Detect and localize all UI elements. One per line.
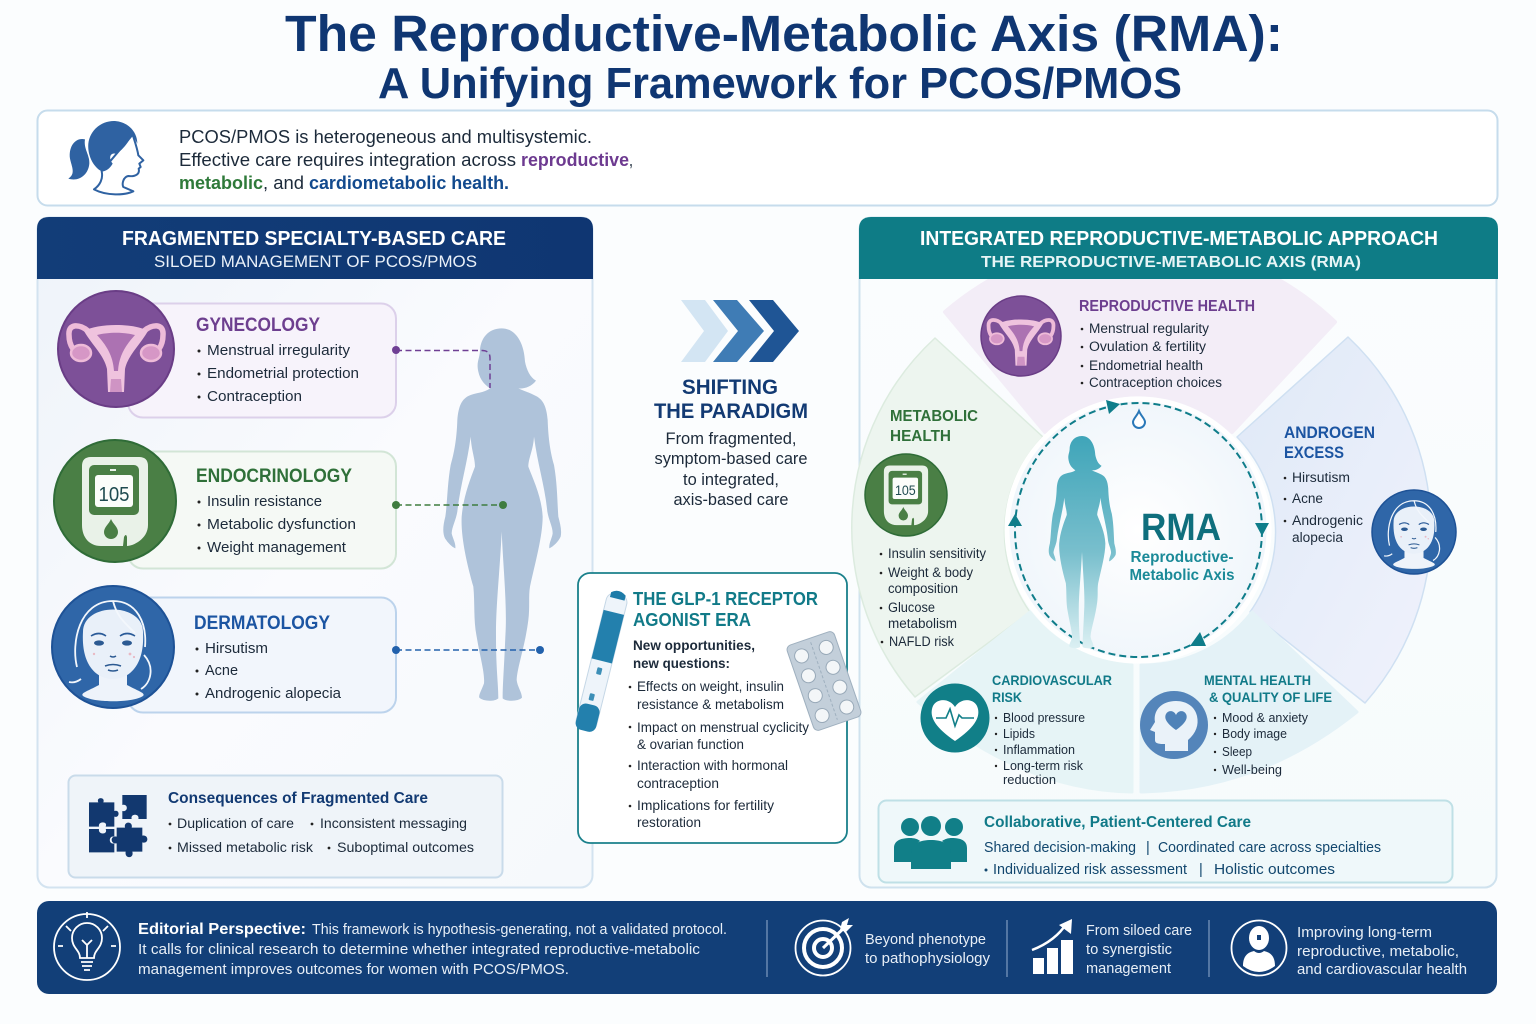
dermatology connector (392, 646, 544, 654)
cardiovascular risk content (920, 672, 1112, 787)
footer: editorial perspective (37, 901, 1497, 994)
metabolic health content: HEALTH (890, 428, 951, 445)
consequences text: Inconsistent messaging (320, 815, 467, 831)
consequences text: Consequences of Fragmented Care (168, 790, 428, 807)
endocrinology text: Insulin resistance (207, 493, 322, 510)
segment: metabolic health (852, 338, 1043, 697)
gynecology text: Menstrual irregularity (207, 342, 351, 359)
androgen excess content: Acne (1292, 491, 1323, 506)
arrow: right (1255, 523, 1269, 536)
collaborative text: Collaborative, Patient-Centered Care (984, 814, 1251, 831)
collaborative text (984, 814, 1381, 878)
dermatology text: Hirsutism (205, 640, 268, 657)
intro text: cardiometabolic health. (309, 173, 509, 193)
icon: small uterus (981, 296, 1061, 376)
cardiovascular risk content: Lipids (1003, 727, 1035, 741)
panel: integrated approach (852, 217, 1498, 888)
intro text: metabolic (179, 173, 263, 193)
GLP-1 text: Interaction with hormonal (637, 757, 788, 773)
icon: puzzle (89, 795, 147, 857)
icon: small meter (865, 454, 947, 536)
metabolic health content: Insulin sensitivity (888, 546, 986, 561)
gynecology text (196, 315, 359, 405)
central RMA circle (1007, 399, 1269, 661)
editorial text (138, 921, 727, 978)
gynecology text: Endometrial protection (207, 365, 359, 382)
intro text: , and (263, 173, 304, 193)
GLP-1 text: resistance & metabolism (637, 696, 784, 712)
endocrinology text: Metabolic dysfunction (207, 516, 356, 533)
shifting the paradigm: THE PARADIGM (654, 400, 808, 423)
icon: injection pen (574, 589, 629, 733)
teal body (1049, 436, 1116, 648)
dermatology text: Acne (205, 662, 238, 679)
gynecology text: Contraception (207, 388, 302, 405)
GLP-1 text: restoration (637, 814, 701, 830)
androgen excess content: Androgenic (1292, 513, 1363, 528)
icon: heart (920, 684, 990, 752)
body silhouette (443, 328, 561, 701)
arrow: paradigm chevrons (681, 300, 799, 362)
shifting the paradigm: axis-based care (674, 491, 788, 509)
reproductive health content: Endometrial health (1089, 358, 1203, 373)
metabolic health content (865, 408, 986, 649)
androgen excess content: alopecia (1292, 530, 1343, 545)
left header: SILOED MANAGEMENT OF PCOS/PMOS (154, 253, 477, 271)
reproductive health content: Menstrual regularity (1089, 321, 1209, 336)
editorial text: management improves outcomes for women with PCOS/PMOS. (138, 961, 569, 978)
endocrinology connector (392, 501, 507, 509)
segment: mental health (1141, 612, 1357, 792)
icon: woman profile with ponytail (68, 121, 143, 194)
intro text: , (629, 150, 633, 170)
right header: INTEGRATED REPRODUCTIVE-METABOLIC APPROACH (920, 228, 1438, 250)
arrow: bottom (1190, 632, 1206, 646)
androgen excess content (1284, 423, 1456, 574)
endocrinology text: Weight management (207, 539, 347, 556)
endocrinology text (196, 466, 356, 556)
consequences text: Missed metabolic risk (177, 839, 314, 855)
icon: target (796, 918, 853, 976)
segment: androgen excess (1237, 337, 1431, 703)
card: gynecology (58, 291, 490, 418)
arrow: left (1008, 514, 1022, 526)
GLP-1 text: THE GLP-1 RECEPTOR (633, 588, 818, 609)
mental health content: Mood & anxiety (1222, 711, 1309, 725)
cardiovascular risk content: CARDIOVASCULAR (992, 672, 1112, 688)
mental health content: Well-being (1222, 763, 1282, 777)
beyond phenotype text (865, 931, 990, 967)
title: A Unifying Framework for PCOS/PMOS (378, 59, 1182, 108)
reproductive health content: REPRODUCTIVE HEALTH (1079, 298, 1255, 315)
androgen excess content: ANDROGEN (1284, 423, 1375, 442)
siloed care text: to synergistic (1086, 941, 1172, 958)
GLP-1 text: New opportunities, (633, 637, 755, 653)
dermatology text (194, 613, 342, 702)
metabolic health content: metabolism (888, 616, 957, 631)
collaborative text: | (1146, 840, 1150, 856)
arrow: top (1106, 400, 1120, 414)
cardiovascular risk content: Long-term risk (1003, 759, 1084, 773)
cardiovascular risk content: reduction (1003, 773, 1056, 787)
left header: FRAGMENTED SPECIALTY-BASED CARE (122, 228, 506, 250)
metabolic health content: Weight & body (888, 565, 973, 580)
beyond phenotype text: to pathophysiology (865, 950, 990, 967)
icon: drop (1133, 411, 1145, 428)
editorial text: It calls for clinical research to determine whether integrated reproductive-metabolic (138, 941, 701, 958)
long-term health text: and cardiovascular health (1297, 961, 1467, 978)
icon: face (52, 586, 174, 708)
icon: blister pack (786, 630, 862, 732)
mental health content (1140, 672, 1332, 777)
mental health content: MENTAL HEALTH (1204, 672, 1311, 688)
reproductive health content: Ovulation & fertility (1089, 339, 1206, 354)
reproductive health content (981, 296, 1255, 390)
shifting the paradigm: SHIFTING (682, 376, 778, 399)
icon: people (894, 816, 967, 869)
icon: uterus (58, 291, 174, 407)
consequences text (168, 790, 474, 855)
GLP-1 text: Implications for fertility (637, 797, 774, 813)
siloed care text: From siloed care (1086, 922, 1192, 939)
cardiovascular risk content: Blood pressure (1003, 711, 1085, 725)
long-term health text (1297, 924, 1467, 978)
consequences text: Suboptimal outcomes (337, 839, 474, 855)
GLP-1 text: contraception (637, 775, 719, 791)
right header (859, 217, 1498, 279)
intro text: reproductive (521, 150, 629, 170)
cardiovascular risk content: Inflammation (1003, 743, 1075, 757)
title: The Reproductive-Metabolic Axis (RMA): (285, 5, 1283, 62)
mental health content: Sleep (1222, 745, 1252, 759)
GLP-1 text (629, 588, 818, 830)
GLP-1 text: Impact on menstrual cyclicity (637, 719, 809, 735)
intro text: Effective care requires integration across (179, 150, 516, 170)
shifting the paradigm (654, 376, 808, 509)
shifting the paradigm: From fragmented, (666, 430, 796, 448)
icon: growth chart (1032, 919, 1073, 974)
panel: consequences (68, 776, 502, 878)
gynecology connector (392, 346, 490, 388)
siloed care text: management (1086, 960, 1172, 977)
icon: person (1232, 920, 1286, 976)
collaborative text: Shared decision-making (984, 840, 1136, 856)
editorial text: This framework is hypothesis-generating, not a validated protocol. (312, 921, 727, 938)
RMA label (1130, 507, 1234, 584)
metabolic health content: composition (888, 581, 958, 596)
segment: cardiovascular risk (918, 612, 1132, 792)
icon: small face (1372, 490, 1456, 574)
mental health content: Body image (1222, 727, 1287, 741)
shifting the paradigm: to integrated, (683, 471, 779, 489)
consequences text: Duplication of care (177, 815, 294, 831)
metabolic health content: NAFLD risk (889, 634, 954, 649)
gynecology text: GYNECOLOGY (196, 315, 320, 336)
GLP-1 text: AGONIST ERA (633, 609, 751, 630)
metabolic health content: METABOLIC (890, 408, 978, 425)
GLP-1 text: Effects on weight, insulin (637, 678, 784, 694)
GLP-1 text: new questions: (633, 655, 730, 671)
androgen excess content: EXCESS (1284, 443, 1344, 462)
long-term health text: reproductive, metabolic, (1297, 943, 1459, 960)
long-term health text: Improving long-term (1297, 924, 1432, 941)
intro text (179, 127, 633, 193)
androgen excess content: Hirsutism (1292, 470, 1350, 485)
left header (37, 217, 593, 279)
card: endocrinology (54, 440, 507, 568)
endocrinology text: ENDOCRINOLOGY (196, 466, 352, 487)
icon: head with heart (1140, 691, 1208, 759)
panel: fragmented care (37, 217, 593, 888)
icon: light bulb (54, 912, 120, 980)
siloed care text (1086, 922, 1192, 977)
title (285, 5, 1283, 108)
editorial text: Editorial Perspective: (138, 921, 306, 938)
icon: glucose meter (54, 440, 176, 562)
RMA label: Metabolic Axis (1130, 567, 1234, 584)
dermatology text: DERMATOLOGY (194, 613, 330, 634)
GLP-1 text: & ovarian function (637, 736, 744, 752)
dermatology text: Androgenic alopecia (205, 685, 342, 702)
collaborative text: | (1199, 862, 1203, 878)
cardiovascular risk content: RISK (992, 689, 1022, 705)
beyond phenotype text: Beyond phenotype (865, 931, 986, 948)
intro text: PCOS/PMOS is heterogeneous and multisystemic. (179, 127, 592, 147)
panel: collaborative care (878, 800, 1452, 882)
reproductive health content: Contraception choices (1089, 375, 1222, 390)
collaborative text: Individualized risk assessment (993, 862, 1187, 878)
collaborative text: Coordinated care across specialties (1158, 840, 1381, 856)
panel: GLP-1 receptor agonist era (574, 573, 862, 843)
panel: introduction (38, 110, 1498, 206)
RMA label: Reproductive- (1130, 549, 1234, 566)
segment: reproductive health (945, 242, 1335, 432)
RMA label: RMA (1141, 507, 1221, 549)
card: dermatology (52, 586, 544, 712)
shifting the paradigm: symptom-based care (654, 450, 808, 468)
metabolic health content: Glucose (888, 600, 935, 615)
collaborative text: Holistic outcomes (1214, 862, 1335, 878)
right header: THE REPRODUCTIVE-METABOLIC AXIS (RMA) (981, 254, 1361, 271)
mental health content: & QUALITY OF LIFE (1209, 689, 1332, 705)
